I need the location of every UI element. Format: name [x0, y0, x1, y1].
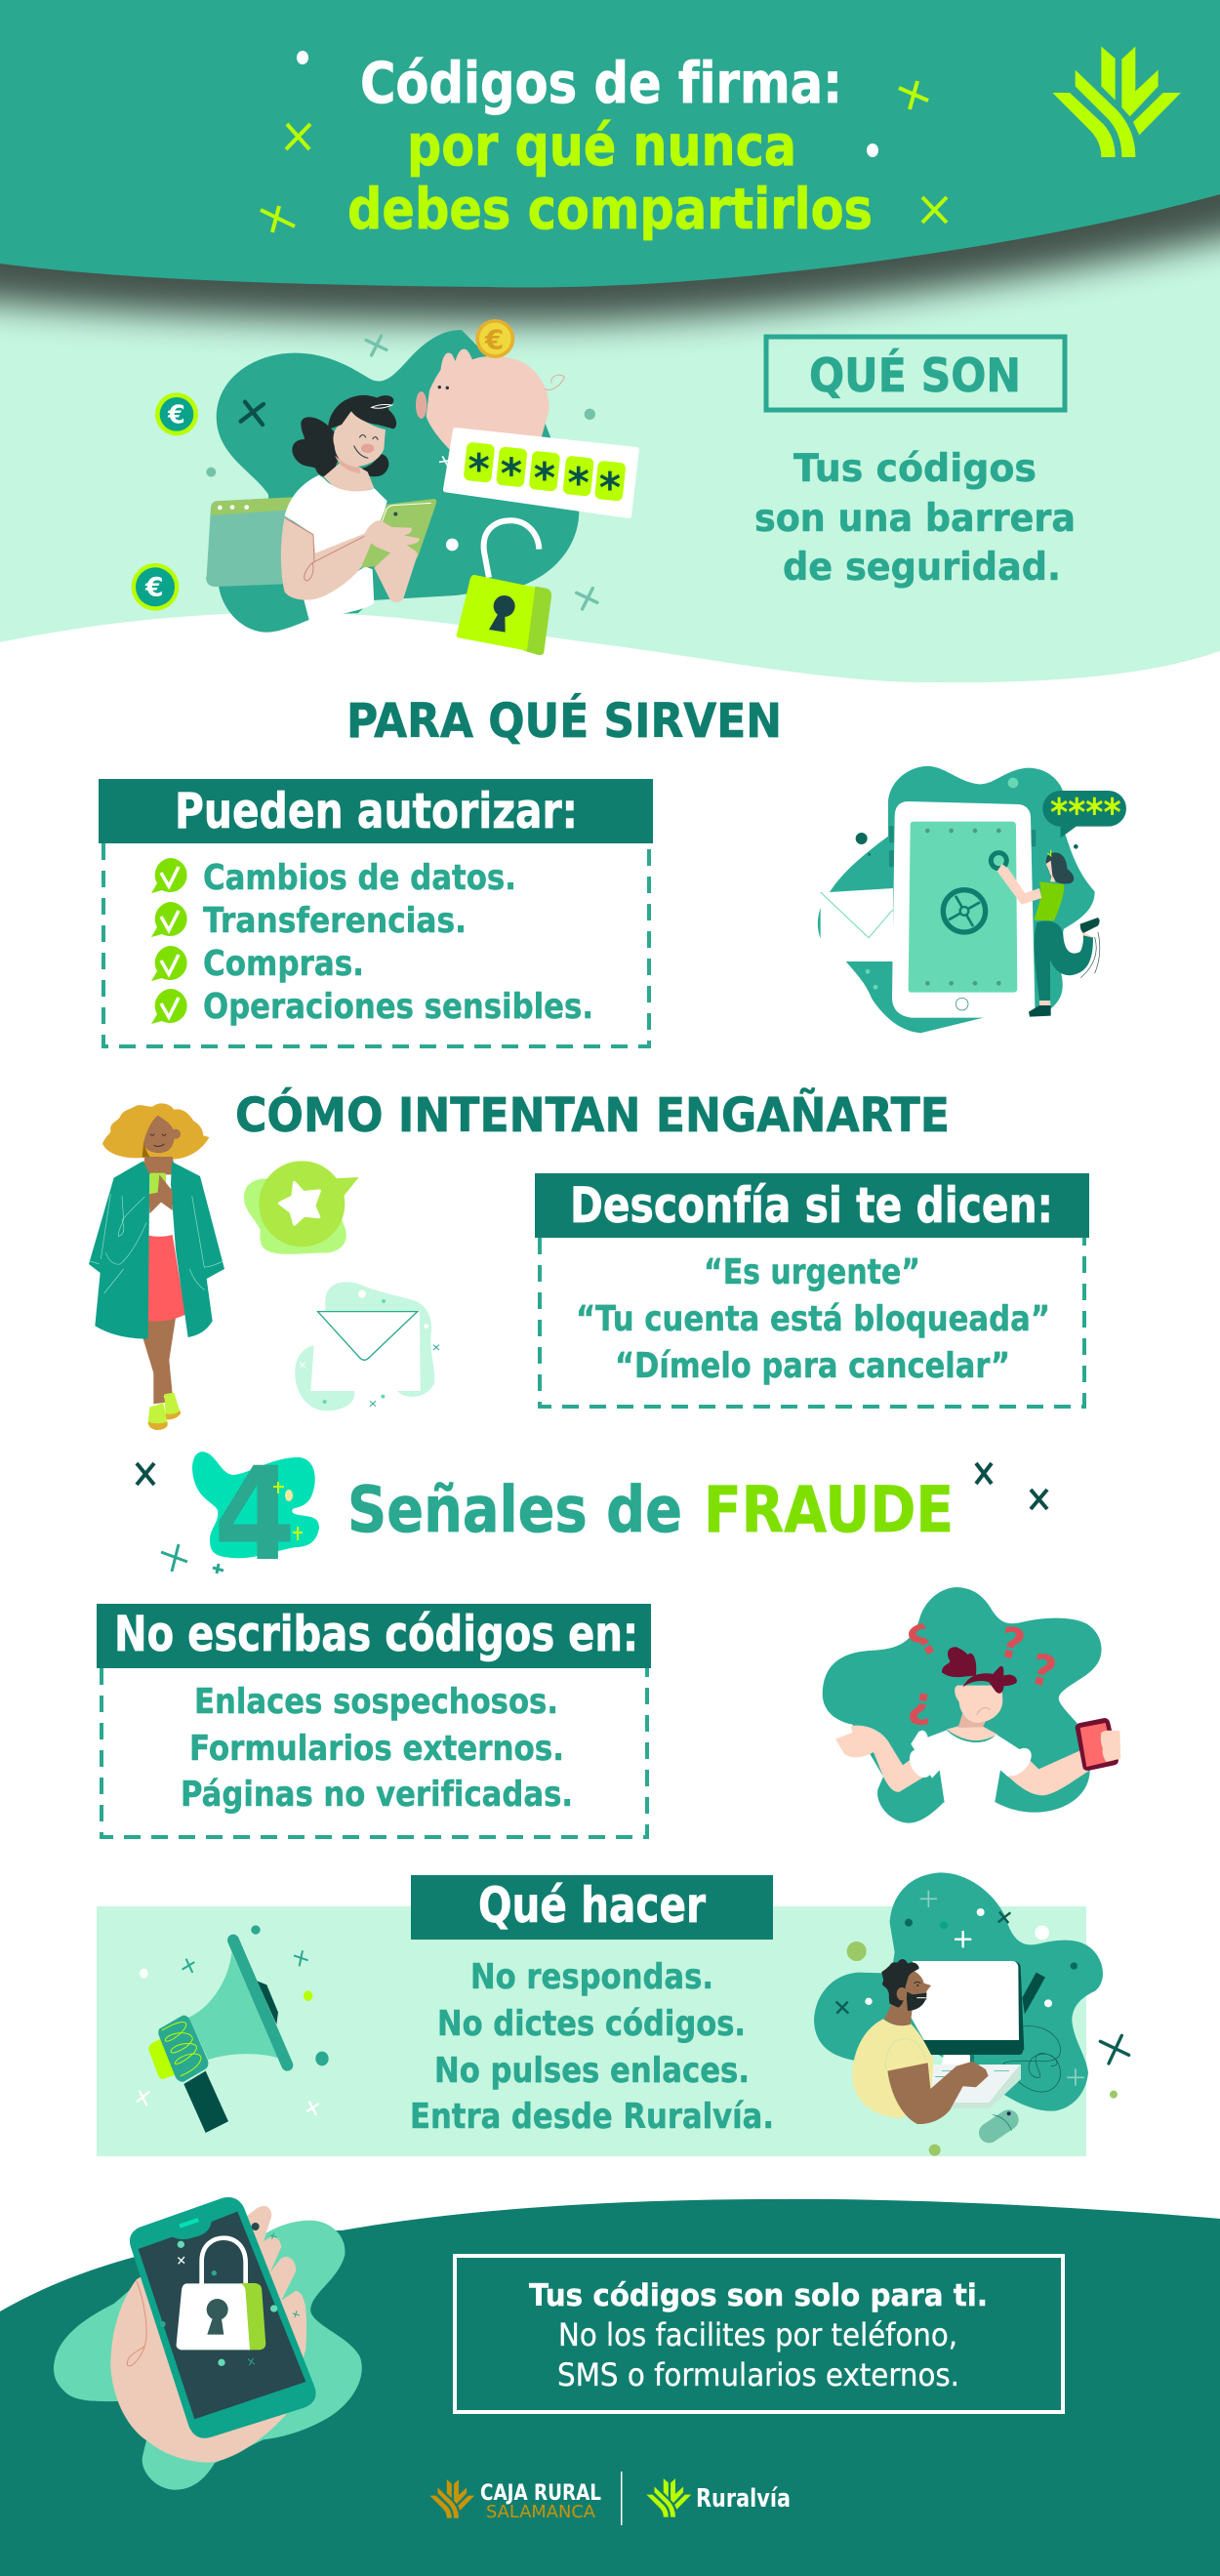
icon: star bubble	[244, 1161, 359, 1254]
panel: qué hacer: Entra desde Ruralvía.	[410, 2097, 774, 2137]
illustration: woman opening phone safe	[818, 766, 1126, 1033]
panel: no escribas códigos: Formularios externos.	[189, 1729, 564, 1769]
panel: desconfía: “Es urgente”	[704, 1252, 920, 1292]
heading: para qué sirven: PARA QUÉ SIRVEN	[346, 693, 782, 749]
text: definition	[754, 447, 1076, 590]
question marks: ?	[900, 1615, 946, 1669]
arms	[835, 1726, 927, 1792]
logo: caja rural salamanca: CAJA RURAL	[480, 2481, 601, 2506]
blob	[217, 330, 579, 633]
password card: *	[567, 459, 590, 508]
panel: no escribas códigos: Enlaces sospechosos.	[194, 1682, 558, 1722]
logo: wheat mark top	[1052, 47, 1181, 157]
password card: *	[599, 464, 621, 512]
closing message box	[455, 2256, 1063, 2412]
computer	[911, 1961, 1045, 2108]
illustration: woman with phone	[89, 1103, 224, 1430]
euro coin	[155, 392, 198, 435]
man	[852, 1959, 989, 2124]
check icon	[151, 858, 187, 893]
sparkles	[241, 402, 264, 425]
list: Cambios de datos.	[203, 858, 516, 898]
list: Compras.	[203, 944, 364, 984]
panel: pueden autorizar: Pueden autorizar:	[175, 783, 578, 839]
panel: no escribas códigos: Páginas no verificadas.	[181, 1775, 573, 1815]
panel: no escribas códigos	[97, 1604, 651, 1837]
header band	[0, 0, 1220, 288]
panel: pueden autorizar	[99, 779, 653, 1046]
tablet	[361, 499, 436, 568]
panel: qué hacer: No pulses enlaces.	[434, 2051, 750, 2091]
sparkles around heading	[137, 1463, 1047, 1574]
browser window	[206, 497, 293, 587]
torso	[911, 1730, 1029, 1822]
euro coin: €	[167, 399, 185, 429]
woman	[281, 395, 436, 620]
blob dots	[856, 833, 868, 844]
euro coin: €	[144, 573, 164, 603]
title	[347, 50, 873, 242]
footer band	[0, 2199, 1220, 2576]
text: definition: de seguridad.	[783, 546, 1061, 590]
header shadow	[0, 0, 1220, 323]
panel: qué hacer	[97, 1875, 1086, 2156]
heading: señales de fraude: Señales de	[347, 1474, 682, 1547]
white wave	[0, 612, 1220, 2576]
closing message box: SMS o formularios externos.	[557, 2356, 959, 2393]
figure	[997, 850, 1100, 1017]
decorations	[836, 1891, 1129, 2156]
question marks: ¿	[906, 1677, 937, 1729]
held phone	[1076, 1718, 1118, 1771]
heading: cómo intentan engañarte: CÓMO INTENTAN ENGAÑARTE	[235, 1087, 950, 1143]
mint background	[0, 0, 1220, 703]
icon: number four: 4	[214, 1440, 296, 1590]
illustration: woman with piggy bank and padlock	[132, 319, 636, 655]
check icon	[151, 989, 187, 1024]
closing message box: Tus códigos son solo para ti.	[529, 2278, 988, 2313]
piggy bank: €	[484, 323, 504, 355]
mouse	[989, 2111, 1012, 2133]
euro coin	[132, 563, 179, 611]
coin	[475, 319, 514, 358]
question marks	[900, 1615, 1061, 1729]
logo: ruralvía: Ruralvía	[696, 2484, 791, 2514]
header sparkles	[261, 51, 947, 232]
heading: señales de fraude: FRAUDE	[704, 1474, 954, 1547]
panel: no escribas códigos: No escribas códigos en:	[114, 1606, 638, 1662]
phone safe	[892, 801, 1036, 1018]
shoes	[164, 1393, 181, 1419]
panel: qué hacer: Qué hacer	[478, 1877, 706, 1934]
logo: caja rural salamanca	[429, 2479, 601, 2522]
illustration: megaphone	[137, 1925, 329, 2133]
padlock	[457, 520, 551, 655]
illustration: man at computer	[814, 1872, 1129, 2156]
padlock	[177, 2238, 265, 2350]
heading box: qué son	[766, 337, 1065, 410]
logo: caja rural salamanca: SALAMANCA	[486, 2502, 596, 2522]
piggy bank	[416, 319, 564, 452]
panel: desconfía	[535, 1173, 1089, 1407]
closing message box: No los facilites por teléfono,	[558, 2316, 957, 2353]
check icon	[151, 946, 187, 981]
illustration: hand holding phone with padlock	[54, 2197, 362, 2490]
hands	[374, 550, 418, 602]
icon: envelope	[295, 1282, 439, 1411]
panel: qué hacer: No dictes códigos.	[437, 2004, 746, 2044]
title: por qué nunca	[407, 112, 796, 179]
list	[203, 858, 593, 1027]
password card: *	[534, 454, 555, 503]
list: Transferencias.	[203, 901, 467, 941]
text: definition: Tus códigos	[793, 447, 1037, 491]
speech bubble with code: ****	[1050, 792, 1121, 836]
heading: señales de fraude	[347, 1474, 954, 1547]
cable	[1003, 2026, 1061, 2092]
panel: desconfía: “Dímelo para cancelar”	[615, 1346, 1010, 1386]
logo: ruralvía	[646, 2478, 791, 2517]
title: Códigos de firma:	[360, 50, 842, 116]
list: Operaciones sensibles.	[203, 987, 593, 1027]
heading box: qué son: QUÉ SON	[809, 349, 1021, 403]
panel: desconfía: “Tu cuenta está bloqueada”	[576, 1299, 1050, 1339]
panel: qué hacer: No respondas.	[470, 1957, 713, 1997]
password card	[446, 430, 636, 515]
question marks: ?	[995, 1618, 1029, 1671]
envelope	[821, 892, 893, 938]
password card: *	[501, 450, 522, 499]
text: definition: son una barrera	[754, 497, 1076, 541]
question marks: ?	[1025, 1645, 1061, 1698]
title: debes compartirlos	[347, 176, 873, 242]
illustration: confused person	[823, 1587, 1120, 1823]
check icon	[151, 902, 187, 937]
head	[955, 1685, 1002, 1723]
panel: desconfía: Desconfía si te dicen:	[570, 1177, 1053, 1234]
hair	[942, 1647, 976, 1677]
password card: *	[468, 445, 490, 494]
